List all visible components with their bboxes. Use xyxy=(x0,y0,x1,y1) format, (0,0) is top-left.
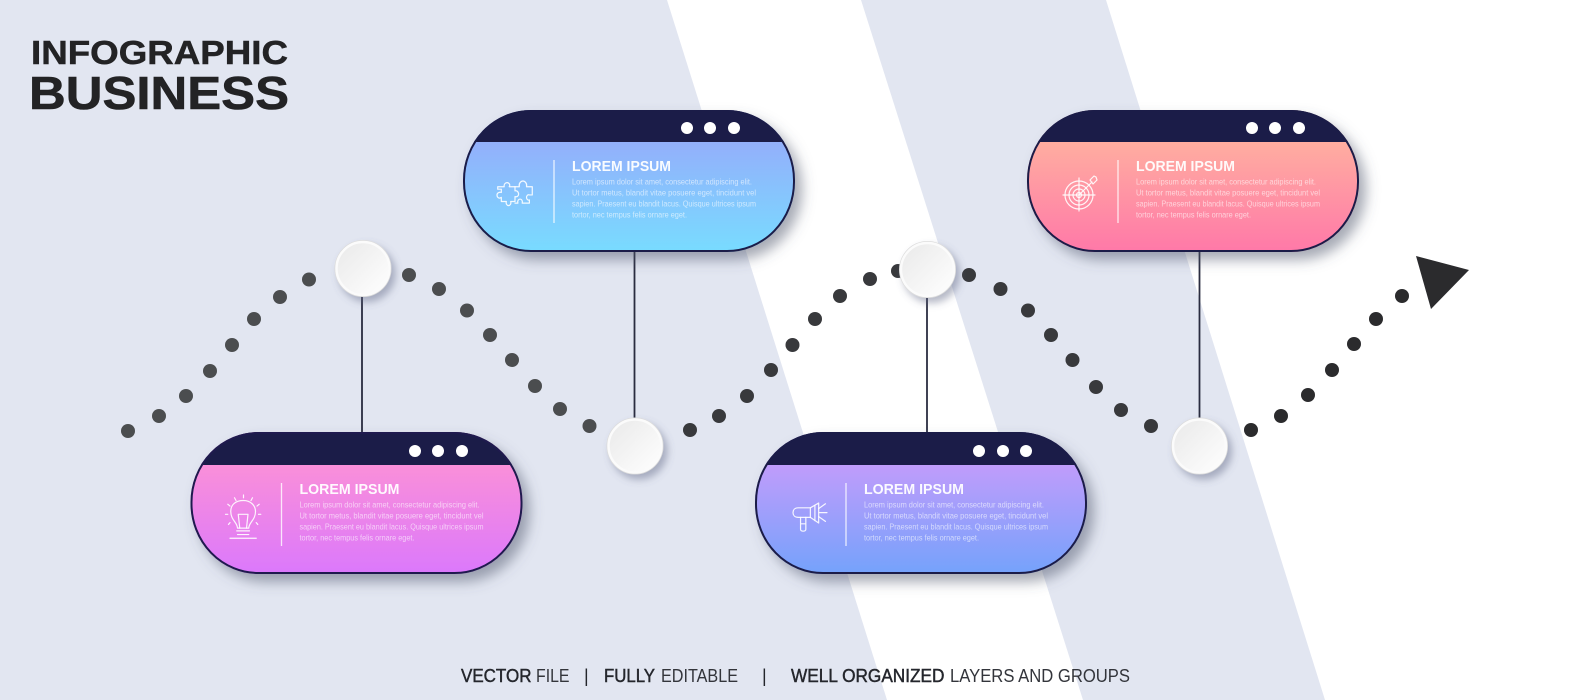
footer text: FILE xyxy=(536,666,570,686)
icon: puzzle xyxy=(497,181,532,206)
connector stems xyxy=(362,250,1200,434)
card body text: Ut tortor metus, blandit vitae posuere eget, tincidunt vel xyxy=(300,510,484,520)
card heading: LOREM IPSUM xyxy=(300,481,400,498)
title: INFOGRAPHIC xyxy=(31,35,288,72)
card heading: LOREM IPSUM xyxy=(1136,158,1235,175)
node 1 xyxy=(334,240,392,297)
card body text: Lorem ipsum dolor sit amet, consectetur adipiscing elit. xyxy=(1136,176,1316,186)
card body text: sapien. Praesent eu blandit lacus. Quisque ultrices ipsum xyxy=(1136,198,1320,208)
title: BUSINESS xyxy=(29,67,289,119)
arrow head xyxy=(1416,256,1469,309)
card body text xyxy=(300,500,484,542)
icon: target xyxy=(1063,176,1097,211)
card body text: sapien. Praesent eu blandit lacus. Quisque ultrices ipsum xyxy=(572,198,756,208)
footer text: EDITABLE xyxy=(661,666,738,686)
card body text xyxy=(864,500,1048,542)
node 4 xyxy=(1171,418,1228,474)
footer text: WELL ORGANIZED xyxy=(791,666,944,686)
panel: coral card xyxy=(1027,110,1359,252)
card heading: LOREM IPSUM xyxy=(864,481,964,498)
footer text: | xyxy=(584,666,589,686)
node 2 xyxy=(606,418,664,474)
dotted wave path xyxy=(121,264,1409,438)
card body text: Ut tortor metus, blandit vitae posuere eget, tincidunt vel xyxy=(572,188,756,198)
panel: pink card xyxy=(190,432,522,574)
title xyxy=(29,35,289,119)
card body text xyxy=(1136,176,1320,220)
card heading: LOREM IPSUM xyxy=(572,158,671,175)
card body text: tortor, nec tempus felis ornare eget. xyxy=(300,532,414,542)
card body text: tortor, nec tempus felis ornare eget. xyxy=(572,210,687,220)
card body text: sapien. Praesent eu blandit lacus. Quisque ultrices ipsum xyxy=(864,522,1048,532)
card body text: Lorem ipsum dolor sit amet, consectetur adipiscing elit. xyxy=(572,176,752,186)
card body text xyxy=(572,176,756,220)
card body text: Lorem ipsum dolor sit amet, consectetur adipiscing elit. xyxy=(300,500,480,510)
panel: purple card xyxy=(755,432,1087,574)
icon: light bulb xyxy=(226,495,261,538)
footer text xyxy=(461,666,1130,686)
card body text: sapien. Praesent eu blandit lacus. Quisque ultrices ipsum xyxy=(300,522,484,532)
card body text: tortor, nec tempus felis ornare eget. xyxy=(864,532,979,542)
footer text: LAYERS AND GROUPS xyxy=(950,666,1130,686)
panel: blue card xyxy=(463,110,795,252)
footer text: FULLY xyxy=(604,666,655,686)
footer text: | xyxy=(762,666,767,686)
card body text: Lorem ipsum dolor sit amet, consectetur adipiscing elit. xyxy=(864,500,1044,510)
icon: megaphone xyxy=(793,503,827,531)
card body text: Ut tortor metus, blandit vitae posuere eget, tincidunt vel xyxy=(864,510,1048,520)
card body text: Ut tortor metus, blandit vitae posuere eget, tincidunt vel xyxy=(1136,188,1320,198)
node 3 xyxy=(899,241,956,298)
footer text: VECTOR xyxy=(461,666,532,686)
card body text: tortor, nec tempus felis ornare eget. xyxy=(1136,210,1251,220)
